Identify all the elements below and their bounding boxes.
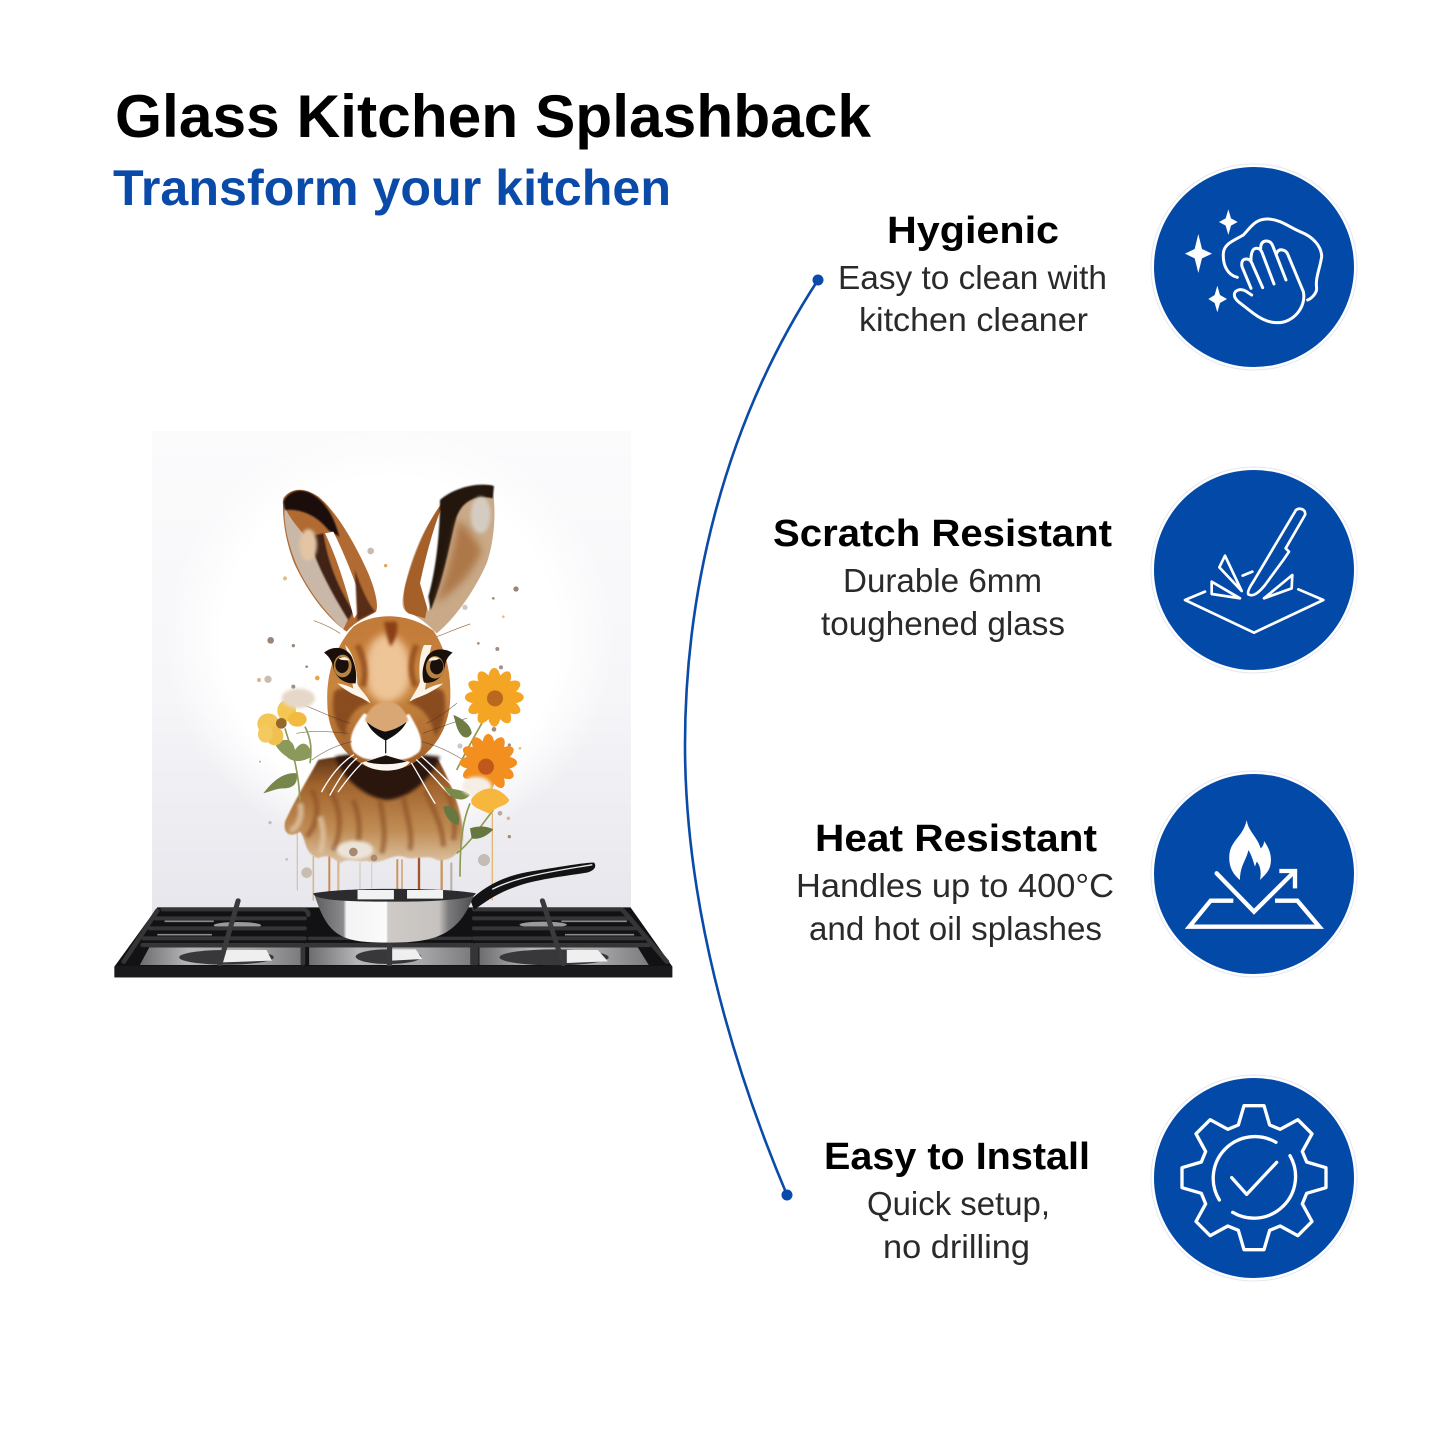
- right ear: [402, 485, 494, 633]
- feature: Scratch Resistant: Durable 6mm: [843, 562, 1042, 599]
- title: Glass Kitchen Splashback: [115, 83, 872, 150]
- frying pan: [313, 863, 595, 943]
- feature: Hygienic: Easy to clean with: [838, 259, 1107, 296]
- feature: Hygienic: Hygienic: [887, 210, 1059, 252]
- chest fur: [285, 753, 463, 863]
- paint drips: [297, 813, 492, 903]
- hare watercolour artwork: [257, 485, 524, 903]
- gas hob: [114, 863, 672, 977]
- orange and yellow flowers: [257, 668, 524, 814]
- feature: Scratch Resistant: Scratch Resistant: [773, 513, 1112, 555]
- icon: hand wiping with sparkles: [1151, 164, 1357, 370]
- product image: splashback above gas hob: [114, 425, 672, 977]
- feature: Heat Resistant: and hot oil splashes: [809, 910, 1102, 947]
- paint splatter: [257, 548, 521, 878]
- hob front edge: [115, 966, 672, 977]
- flower stems and leaves: [263, 712, 493, 877]
- icon: flame over glass: [1151, 771, 1357, 977]
- feature: Easy to Install: no drilling: [883, 1228, 1030, 1265]
- feature: Easy to Install: Quick setup,: [867, 1185, 1050, 1222]
- steel burner plates: [140, 947, 649, 965]
- grate highlights: [157, 921, 634, 935]
- feature: Hygienic: kitchen cleaner: [859, 301, 1088, 338]
- glass splashback panel: [152, 425, 631, 916]
- subtitle: Transform your kitchen: [113, 160, 671, 216]
- connecting curve with end dots: [685, 274, 824, 1200]
- hare eyes: [324, 648, 453, 683]
- feature: Heat Resistant: Handles up to 400°C: [796, 867, 1114, 904]
- feature: Easy to Install: Easy to Install: [824, 1136, 1090, 1178]
- hare head: [327, 616, 450, 770]
- grate bars: [124, 901, 667, 965]
- feature: Hygienic: [838, 210, 1107, 338]
- left ear: [283, 490, 377, 632]
- feature: Heat Resistant: Heat Resistant: [815, 818, 1097, 860]
- icon: knife scratching glass: [1151, 467, 1357, 673]
- feature: Scratch Resistant: [773, 513, 1112, 642]
- hare muzzle and nose: [351, 702, 421, 771]
- feature: Scratch Resistant: toughened glass: [821, 605, 1065, 642]
- icon: gear with check mark: [1151, 1075, 1357, 1281]
- burners: [179, 922, 609, 965]
- hare whiskers: [297, 621, 470, 803]
- feature: Heat Resistant: [796, 818, 1114, 947]
- feature: Easy to Install: [824, 1136, 1090, 1265]
- hob body: [114, 907, 672, 977]
